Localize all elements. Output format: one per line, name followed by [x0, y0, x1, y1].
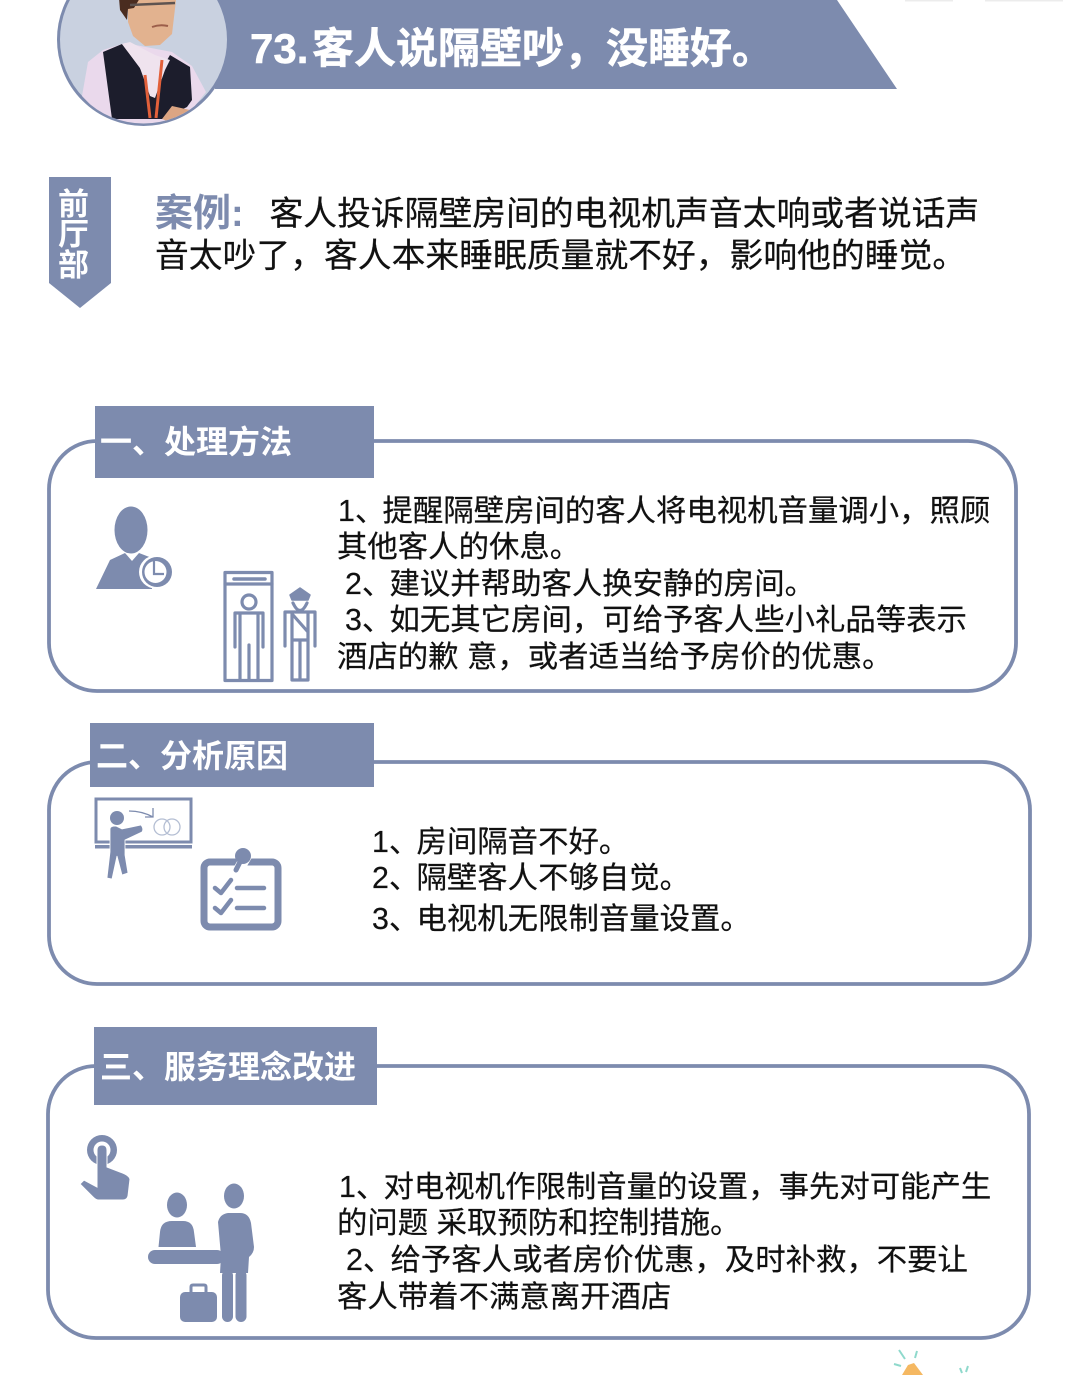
icon: security gate and guard: [225, 572, 315, 680]
panel 3 text: 的问题 采取预防和控制措施。: [337, 1206, 741, 1240]
panel 1 text: 3、: [345, 603, 392, 637]
panel 1 text: 2、: [345, 567, 392, 601]
panel 3 text: 给予客人或者房价优惠，及时补救，不要让: [390, 1243, 968, 1277]
heading tab 3: 三、服务理念改进: [100, 1049, 356, 1085]
title banner: [215, 0, 897, 89]
title text: 客人说隔壁吵，没睡好。: [312, 25, 774, 72]
heading tab 2: [90, 723, 374, 787]
panel 3 text: 1、: [339, 1170, 386, 1204]
heading tab 1: 一、处理方法: [100, 424, 292, 460]
panel 1: handling method: [49, 406, 1016, 691]
panel 1 text: 提醒隔壁房间的客人将电视机音量调小，照顾: [382, 494, 990, 528]
panel 1 text: 如无其它房间，可给予客人些小礼品等表示: [390, 603, 967, 637]
department ribbon: [49, 177, 111, 308]
panel 2 text: 房间隔音不好。: [416, 825, 629, 859]
panel 1 text: 其他客人的休息。: [337, 530, 580, 564]
ribbon label: 部: [58, 248, 89, 283]
panel 2 text: 3、: [372, 902, 419, 936]
panel 2: cause analysis: [49, 723, 1030, 984]
icon: person with clock: [96, 506, 172, 589]
panel 2 text: 隔壁客人不够自觉。: [416, 861, 690, 895]
icon: teacher at whiteboard: [95, 799, 192, 879]
case text: 案例:: [155, 193, 244, 235]
title text: 73.: [250, 25, 308, 72]
panel 2 text: 2、: [372, 861, 419, 895]
portrait photo: [58, 0, 228, 125]
faint watermark top right: [905, 0, 1063, 2]
panel 2 text: 电视机无限制音量设置。: [416, 902, 751, 936]
heading tab 1: [95, 406, 374, 478]
icon: touch hand: [80, 1135, 130, 1200]
panel 3 text: [337, 1170, 991, 1314]
panel 1 text: [337, 494, 990, 674]
panel 3: service improvement: [48, 1027, 1029, 1338]
panel 1 text: 1、: [338, 494, 385, 528]
panel 2 text: 1、: [372, 825, 419, 859]
panel 2 text: [372, 825, 751, 936]
ribbon label: 厅: [58, 217, 89, 252]
icon: reception desk with guest: [148, 1184, 254, 1322]
heading tab 3: [94, 1027, 377, 1105]
ribbon label: 前: [58, 187, 89, 222]
icon: checklist clipboard: [204, 848, 278, 927]
case text: 客人投诉隔壁房间的电视机声音太响或者说话声: [270, 195, 979, 233]
case text: 音太吵了，客人本来睡眠质量就不好，影响他的睡觉。: [155, 237, 966, 275]
panel 3 text: 客人带着不满意离开酒店: [337, 1280, 671, 1314]
panel 3 text: 2、: [346, 1243, 393, 1277]
icon: sparkle decoration: [894, 1350, 968, 1375]
heading tab 2: 二、分析原因: [96, 738, 288, 774]
panel 1 text: 建议并帮助客人换安静的房间。: [390, 567, 815, 601]
case text: [155, 193, 979, 275]
panel 3 text: 对电视机作限制音量的设置，事先对可能产生: [384, 1170, 991, 1204]
panel 1 text: 酒店的歉 意，或者适当给予房价的优惠。: [337, 640, 892, 674]
